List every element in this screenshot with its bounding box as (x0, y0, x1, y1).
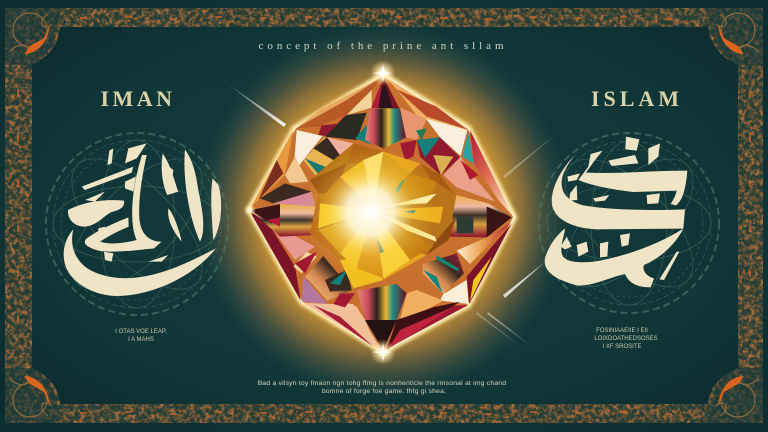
gem halo (193, 22, 573, 402)
icon: corner ornament bottom left (5, 368, 60, 423)
text block: bottom caption (258, 380, 506, 395)
text block: left caption: I A MAHS (128, 337, 154, 343)
icon: right calligraphy (545, 137, 687, 287)
icon: corner ornament top left (5, 8, 60, 65)
panel: left rosette (46, 133, 228, 315)
text block: right caption: LOIXDOATHEDSOSES (594, 336, 658, 342)
panel: right rosette (539, 133, 719, 313)
icon: central diamond (249, 75, 514, 352)
outer facets (250, 76, 513, 351)
central star facets (310, 143, 457, 288)
text block: bottom caption: bomne of forge foe game. fhfg gi shea. (322, 388, 446, 395)
icon: left calligraphy (64, 143, 221, 296)
heading: IMAN: IMAN (100, 86, 176, 111)
text block: right caption (594, 328, 658, 350)
heading: ISLAM: ISLAM (591, 86, 683, 111)
text block: bottom caption: Bad a vilsyn toy fmaon ngn tohg ffmg is nonhenticle the rmsonal at img chand (258, 380, 506, 387)
light rays (222, 80, 555, 346)
text block: left caption: I OTAS VOE LEAP, (115, 329, 167, 335)
text block: right caption: FOSINIAAEIIE I EII (596, 328, 648, 334)
icon: corner ornament top right (708, 8, 763, 65)
icon: corner ornament bottom right (708, 368, 763, 423)
diamond outline (249, 75, 514, 352)
diamond glow (249, 75, 514, 352)
title: concept of the prine ant sllam (259, 40, 507, 52)
sparkles (244, 60, 396, 365)
diamond core light (304, 146, 436, 278)
text block: left caption (115, 329, 167, 343)
text block: right caption: I XF SROSITE (602, 344, 642, 350)
